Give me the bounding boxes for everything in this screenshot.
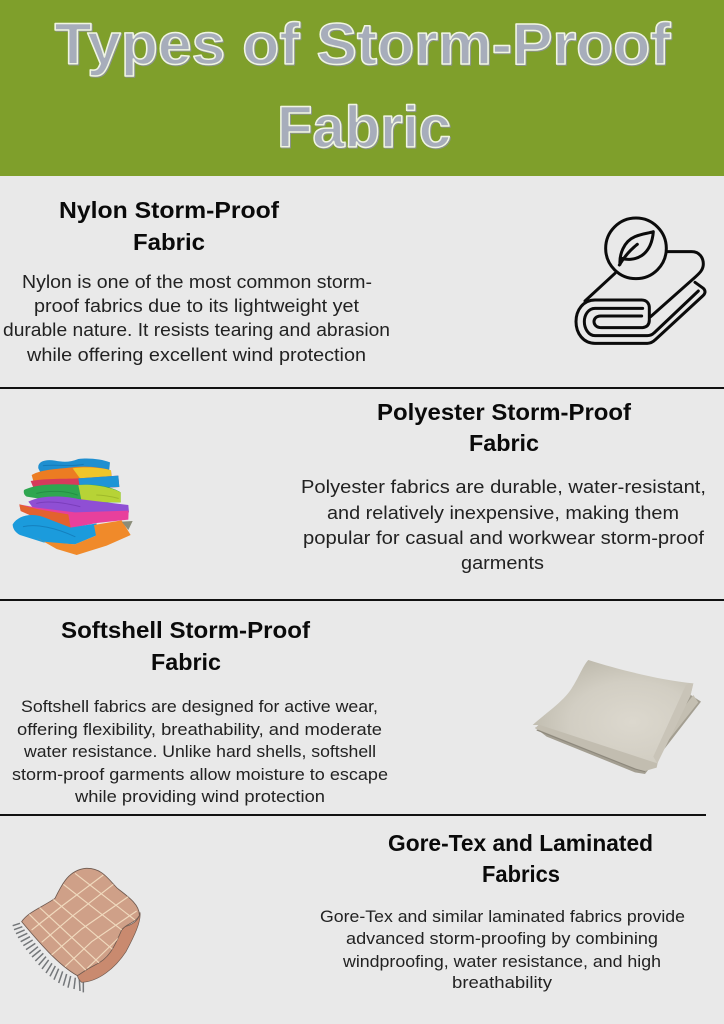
title: Fabric [277,95,451,160]
text block: polyester: popular for casual and workwear storm-proof [303,528,705,548]
header band [0,0,724,176]
heading: polyester: Polyester Storm-Proof [377,399,631,425]
panel: polyester [13,399,706,573]
heading: gore-tex: Fabrics [482,861,560,887]
heading: gore-tex: Gore-Tex and Laminated [388,830,653,856]
panel: softshell [12,617,701,806]
divider [0,387,724,389]
heading: nylon: Nylon Storm-Proof [59,197,279,223]
title: Types of Storm-Proof [54,12,671,77]
text block: softshell: while providing wind protection [74,788,325,806]
heading: nylon [59,197,279,255]
heading: gore-tex [388,830,653,887]
text block: softshell: offering flexibility, breathability, and moderate [17,721,382,739]
icon: folded fabric with leaf [576,218,705,343]
text block: nylon [3,272,390,365]
text block: gore-tex [320,908,685,992]
text block: nylon: proof fabrics due to its lightweight yet [34,296,359,316]
heading: polyester: Fabric [469,430,539,456]
panel: gore-tex [13,830,685,992]
heading: softshell [61,617,310,675]
text block: gore-tex: breathability [452,974,553,992]
text block: polyester: Polyester fabrics are durable, water-resistant, [301,477,706,497]
title [54,12,671,160]
text block: nylon: Nylon is one of the most common storm- [22,272,372,292]
panel: nylon [3,197,705,365]
text block: softshell [12,698,388,806]
heading: softshell: Softshell Storm-Proof [61,617,310,643]
image: folded beige cloth [533,660,701,774]
text block: polyester: garments [461,553,544,573]
text block: nylon: durable nature. It resists tearing and abrasion [3,320,390,340]
text block: softshell: storm-proof garments allow moisture to escape [12,766,388,784]
text block: gore-tex: advanced storm-proofing by combining [346,930,658,948]
text block: nylon: while offering excellent wind protection [26,345,366,365]
heading: nylon: Fabric [133,229,205,255]
image: checked blanket with fringe [13,868,140,992]
heading: softshell: Fabric [151,649,221,675]
text block: polyester [301,477,706,573]
divider [0,599,724,601]
text block: gore-tex: Gore-Tex and similar laminated fabrics provide [320,908,685,926]
text block: gore-tex: windproofing, water resistance, and high [342,953,661,971]
text block: softshell: water resistance. Unlike hard shells, softshell [23,743,376,761]
heading: polyester [377,399,631,456]
text block: softshell: Softshell fabrics are designed for active wear, [21,698,378,716]
image: stack of colourful clothes [13,458,133,555]
text block: polyester: and relatively inexpensive, making them [327,503,679,523]
divider [0,814,706,816]
